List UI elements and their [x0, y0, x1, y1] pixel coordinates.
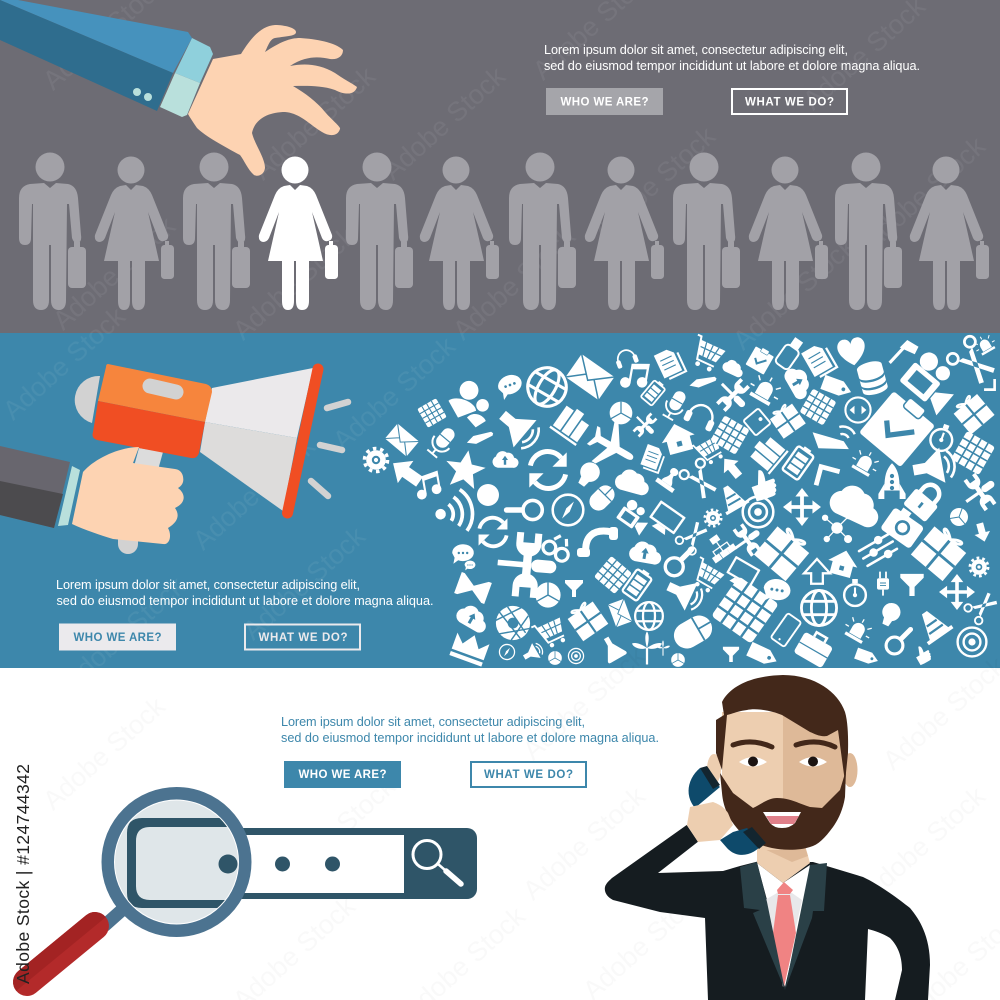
text block: recruitment [544, 43, 920, 73]
icon: recruiter hand with sleeve [0, 0, 357, 176]
watermark: repeated Adobe Stock: Adobe Stock [247, 61, 381, 186]
watermark: repeated Adobe Stock: Adobe Stock [377, 61, 511, 186]
watermark: repeated Adobe Stock: Adobe Stock [237, 521, 371, 646]
button: what we do (recruitment): WHAT WE DO? [745, 96, 834, 108]
stock id caption: Adobe Stock | #124744342 [13, 764, 33, 984]
text block: recruitment: sed do eiusmod tempor incididunt ut labore et dolore magna aliqua. [544, 59, 920, 73]
text block: marketing [56, 578, 434, 608]
button: what we do (contact): WHAT WE DO? [484, 769, 573, 781]
button: who we are (marketing) [59, 624, 176, 650]
watermark: repeated Adobe Stock: Adobe Stock [47, 211, 181, 336]
panel: marketing band background [0, 333, 1000, 668]
infographic canvas: Adobe Stock [267, 771, 401, 896]
panel: recruitment band background [0, 0, 1000, 333]
text block: contact: Lorem ipsum dolor sit amet, consectetur adipiscing elit, [281, 715, 585, 729]
watermark: repeated Adobe Stock [0, 0, 991, 696]
watermark: repeated Adobe Stock: Adobe Stock [227, 221, 361, 346]
infographic canvas: Adobe Stock [517, 641, 651, 766]
watermark: repeated Adobe Stock: Adobe Stock [0, 301, 131, 426]
button: who we are (recruitment): WHO WE ARE? [560, 96, 648, 108]
icon cloud: marketing symbols [364, 332, 1000, 668]
search bar [225, 828, 477, 899]
text block: marketing: Lorem ipsum dolor sit amet, consectetur adipiscing elit, [56, 578, 360, 592]
row of business people [19, 152, 989, 310]
infographic canvas: Adobe Stock [517, 781, 651, 906]
watermark: repeated Adobe Stock: Adobe Stock [857, 131, 991, 256]
highlighted woman [259, 156, 338, 310]
text block: recruitment: Lorem ipsum dolor sit amet, consectetur adipiscing elit, [544, 43, 848, 57]
icon: bearded businessman on phone [605, 675, 930, 1000]
infographic canvas: Adobe Stock [857, 781, 991, 906]
button: what we do (recruitment) [732, 89, 847, 114]
watermark: repeated Adobe Stock: Adobe Stock [447, 221, 581, 346]
watermark: repeated Adobe Stock: Adobe Stock [57, 571, 191, 696]
icon: large magnifying glass [7, 794, 250, 1000]
infographic canvas: Adobe Stock [37, 691, 171, 816]
watermark: repeated Adobe Stock: Adobe Stock [187, 431, 321, 556]
watermark: repeated Adobe Stock: Adobe Stock [327, 331, 461, 456]
button: who we are (marketing): WHO WE ARE? [74, 632, 162, 644]
button: who we are (recruitment) [546, 88, 663, 115]
text block: contact: sed do eiusmod tempor incididunt ut labore et dolore magna aliqua. [281, 731, 659, 745]
watermark: repeated Adobe Stock: Adobe Stock [727, 231, 861, 356]
icon: hand holding megaphone [0, 364, 348, 554]
watermark: repeated Adobe Stock: Adobe Stock [587, 121, 721, 246]
button: who we are (contact) [284, 761, 401, 788]
panel: contact band background [0, 668, 1000, 1000]
text block: contact [281, 715, 659, 745]
text block: marketing: sed do eiusmod tempor incididunt ut labore et dolore magna aliqua. [56, 594, 434, 608]
button: what we do (contact) [471, 762, 586, 787]
button: what we do (marketing) [245, 624, 360, 650]
button: who we are (contact): WHO WE ARE? [298, 769, 386, 781]
button: what we do (marketing): WHAT WE DO? [258, 632, 348, 644]
